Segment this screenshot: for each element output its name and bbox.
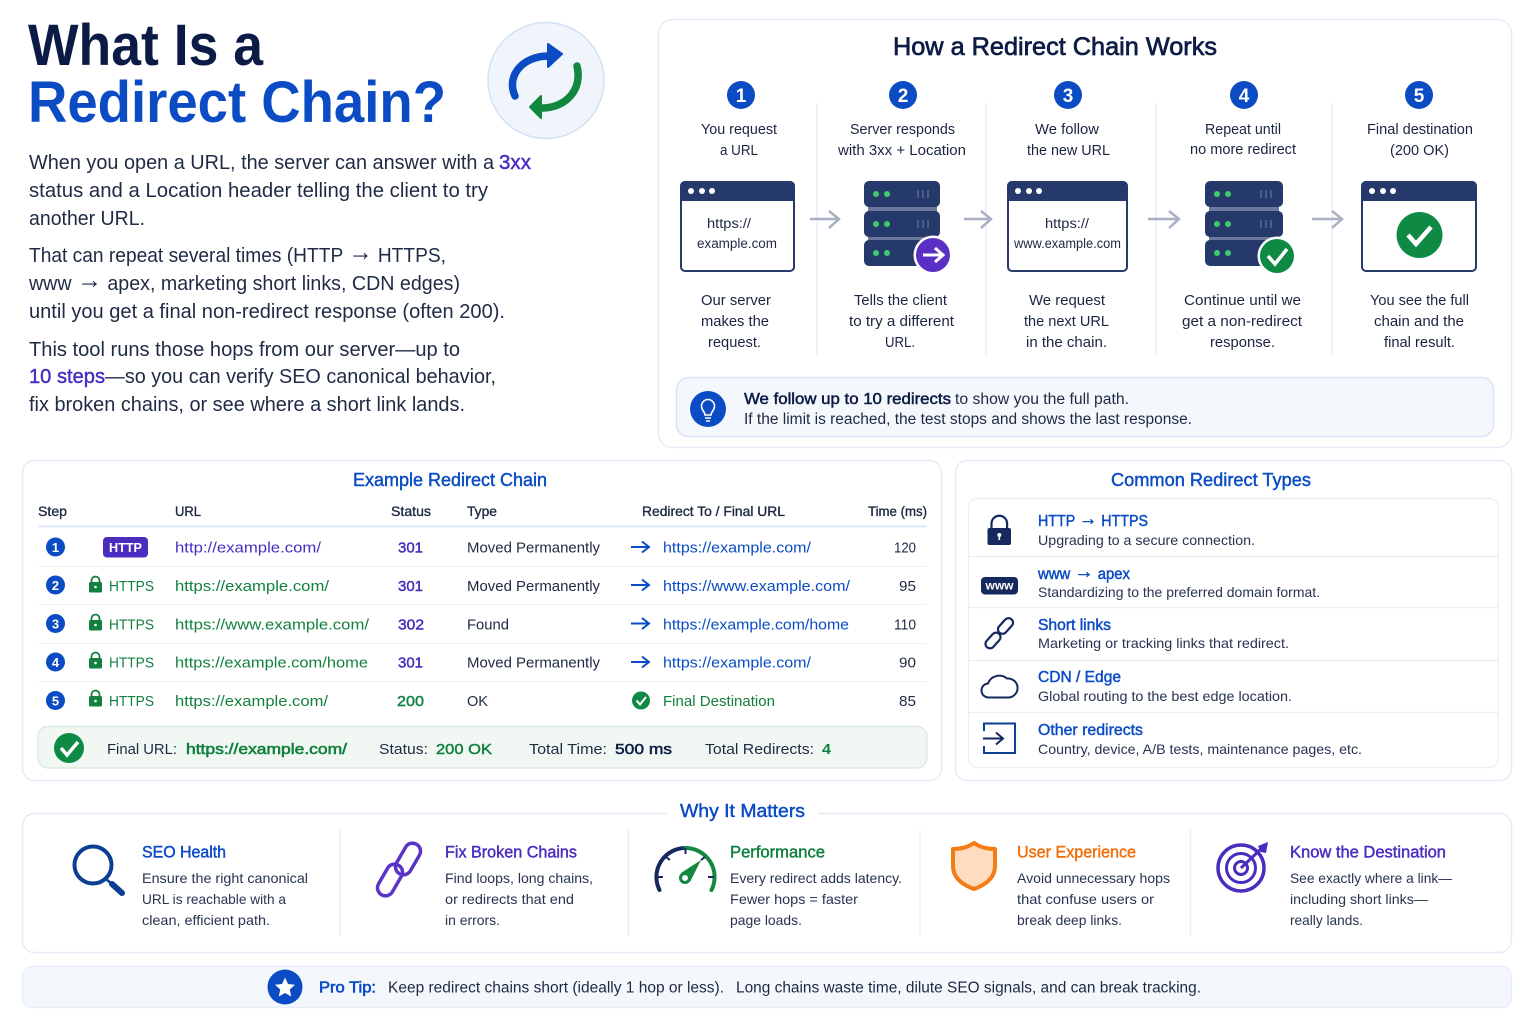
step 5: chain and the bbox=[1374, 314, 1464, 330]
table row 4: HTTPS bbox=[109, 656, 154, 672]
type: http to https: HTTP bbox=[1038, 513, 1078, 530]
item: seo health: SEO Health bbox=[142, 844, 226, 862]
pro tip bar: Keep redirect chains short (ideally 1 hop or less). bbox=[388, 980, 724, 996]
step 5: 5 bbox=[1414, 86, 1425, 107]
text block: intro: —so you can verify SEO canonical behavior, bbox=[105, 365, 496, 388]
callout: follow up to 10 redirects bbox=[676, 378, 1494, 436]
table row 5: 5 bbox=[52, 694, 59, 708]
table row 2: Moved Permanently bbox=[467, 579, 601, 595]
item: performance: Every redirect adds latency. bbox=[730, 871, 902, 886]
table row 4 bbox=[46, 652, 916, 672]
type: http to https: → bbox=[1079, 508, 1097, 530]
text block: intro bbox=[28, 151, 532, 416]
table row 5: 200 bbox=[397, 694, 424, 710]
item: user experience bbox=[953, 843, 1170, 928]
type: http to https: HTTPS bbox=[1097, 513, 1148, 530]
table header: Redirect To / Final URL bbox=[642, 503, 785, 519]
table row 3: 3 bbox=[52, 616, 59, 632]
type: short links: Short links bbox=[1038, 617, 1111, 634]
table header: Time (ms) bbox=[868, 503, 927, 519]
text block: intro: until you get a final non-redirect response (often 200). bbox=[29, 300, 505, 323]
step 5: final result. bbox=[1384, 335, 1455, 351]
summary bar: Total Time: bbox=[529, 741, 607, 758]
pro tip bar: Long chains waste time, dilute SEO signals, and can break tracking. bbox=[736, 980, 1201, 996]
step 4: Continue until we bbox=[1184, 293, 1301, 309]
table row 4: 90 bbox=[899, 656, 916, 672]
panel: how a redirect chain works bbox=[658, 20, 1512, 448]
step 1: You request bbox=[701, 122, 777, 138]
type: www to apex bbox=[981, 561, 1320, 600]
table row 5: Final Destination bbox=[663, 694, 775, 710]
text block: intro: another URL. bbox=[29, 207, 145, 230]
type: short links bbox=[984, 616, 1289, 651]
step 1: makes the bbox=[701, 314, 769, 330]
heading: why it matters: Why It Matters bbox=[680, 800, 805, 821]
table row 3: Found bbox=[467, 618, 509, 634]
step 3: in the chain. bbox=[1026, 335, 1107, 351]
text block: intro: fix broken chains, or see where a short link lands. bbox=[29, 393, 465, 416]
table row 2: 95 bbox=[899, 579, 916, 595]
text block: intro: apex, marketing short links, CDN edges) bbox=[102, 272, 460, 295]
table row 1 bbox=[46, 537, 916, 558]
type: short links: Marketing or tracking links that redirect. bbox=[1038, 636, 1289, 651]
summary bar: https://example.com/ bbox=[186, 741, 348, 758]
type: www to apex: www bbox=[984, 580, 1014, 592]
table row 4: 301 bbox=[398, 656, 423, 672]
step 2: to try a different bbox=[849, 314, 954, 330]
item: fix broken chains: or redirects that end bbox=[445, 892, 574, 907]
item: know the destination bbox=[1218, 842, 1452, 928]
step 1: 1 bbox=[736, 86, 747, 107]
table row 3: HTTPS bbox=[109, 618, 154, 634]
table row 3 bbox=[46, 614, 916, 634]
step 2: Tells the client bbox=[854, 293, 947, 309]
table row 3: 110 bbox=[894, 618, 916, 634]
table row 2: https://example.com/ bbox=[175, 579, 330, 595]
table row 1: http://example.com/ bbox=[175, 540, 322, 556]
step 1 bbox=[680, 81, 795, 351]
arrow 3 bbox=[1148, 211, 1179, 228]
table row 4: https://example.com/ bbox=[663, 656, 812, 672]
item: fix broken chains: Fix Broken Chains bbox=[445, 844, 577, 862]
title: Redirect Chain? bbox=[28, 70, 446, 135]
step 4: no more redirect bbox=[1190, 142, 1296, 158]
summary bar: Final URL: bbox=[107, 741, 177, 758]
type: www to apex: Standardizing to the preferred domain format. bbox=[1038, 585, 1320, 600]
table row 4: Moved Permanently bbox=[467, 656, 601, 672]
table row 2: 301 bbox=[398, 579, 423, 595]
table row 4: 4 bbox=[52, 655, 60, 670]
summary bar: Total Redirects: bbox=[705, 741, 814, 758]
item: user experience: User Experience bbox=[1017, 844, 1136, 862]
item: fix broken chains: Find loops, long chains, bbox=[445, 871, 593, 886]
table row 5: https://example.com/ bbox=[175, 694, 329, 710]
table header: Step bbox=[38, 503, 67, 519]
table row 2 bbox=[46, 576, 916, 595]
type: other redirects: Other redirects bbox=[1038, 722, 1143, 739]
step 1: Our server bbox=[701, 293, 771, 309]
step 3 bbox=[1007, 81, 1128, 351]
table row 2: https://www.example.com/ bbox=[663, 579, 851, 595]
text block: intro: status and a Location header telling the client to try bbox=[29, 179, 489, 202]
text block: intro: When you open a URL, the server can answer with a bbox=[29, 151, 495, 174]
table row 5: OK bbox=[467, 694, 488, 710]
item: know the destination: including short links— bbox=[1290, 892, 1428, 907]
step 5 bbox=[1361, 81, 1477, 351]
step 3: the next URL bbox=[1024, 314, 1109, 330]
panel: common redirect types bbox=[956, 460, 1512, 780]
table row 1: Moved Permanently bbox=[467, 540, 601, 556]
text block: intro: That can repeat several times (HTTP bbox=[29, 244, 365, 267]
item: know the destination: See exactly where a link— bbox=[1290, 871, 1452, 886]
step 3: 3 bbox=[1063, 86, 1073, 107]
type: other redirects bbox=[983, 722, 1362, 757]
step 5: Final destination bbox=[1367, 122, 1473, 138]
table row 3: https://www.example.com/ bbox=[175, 618, 370, 634]
table row 1: 1 bbox=[52, 540, 59, 555]
item: user experience: that confuse users or bbox=[1017, 892, 1154, 907]
type: http to https: Upgrading to a secure connection. bbox=[1038, 533, 1255, 548]
type: other redirects: Country, device, A/B tests, maintenance pages, etc. bbox=[1038, 742, 1362, 757]
heading: example redirect chain: Example Redirect Chain bbox=[353, 469, 547, 490]
step 2: with 3xx + Location bbox=[837, 143, 966, 159]
table row 5 bbox=[46, 690, 916, 710]
step 4: response. bbox=[1210, 335, 1275, 351]
summary bar: 200 OK bbox=[436, 741, 492, 758]
type: www to apex: → bbox=[1074, 561, 1094, 583]
step 4: Repeat until bbox=[1205, 122, 1281, 138]
heading: common redirect types: Common Redirect Types bbox=[1111, 469, 1311, 490]
icon: redirect cycle bbox=[488, 22, 604, 138]
item: performance: Fewer hops = faster bbox=[730, 892, 858, 907]
table row 1: https://example.com/ bbox=[663, 540, 812, 556]
item: user experience: break deep links. bbox=[1017, 913, 1122, 928]
table header bbox=[38, 503, 927, 519]
item: seo health: URL is reachable with a bbox=[142, 892, 286, 907]
text block: intro: www bbox=[29, 272, 73, 295]
step 3: www.example.com bbox=[1013, 236, 1121, 251]
step 3: the new URL bbox=[1027, 143, 1110, 159]
step 1: https:// bbox=[707, 216, 751, 231]
summary bar: Status: bbox=[379, 741, 428, 758]
item: performance bbox=[656, 844, 902, 928]
pro tip bar bbox=[22, 966, 1512, 1008]
summary bar: 4 bbox=[822, 741, 832, 758]
table row 1: HTTP bbox=[109, 540, 142, 555]
heading: how it works: How a Redirect Chain Works bbox=[893, 33, 1217, 61]
table header: Status bbox=[391, 503, 431, 519]
item: know the destination: really lands. bbox=[1290, 913, 1363, 928]
step 4: get a non-redirect bbox=[1182, 314, 1302, 330]
table row 5: HTTPS bbox=[109, 694, 154, 710]
item: fix broken chains bbox=[375, 840, 593, 928]
text block: intro: 3xx bbox=[499, 151, 532, 174]
pro tip bar: Pro Tip: bbox=[319, 980, 376, 996]
step 2: Server responds bbox=[850, 122, 955, 138]
title bbox=[28, 13, 446, 135]
arrow 4 bbox=[1312, 211, 1342, 228]
step 2: URL. bbox=[885, 335, 915, 351]
type: cdn edge: Global routing to the best edge location. bbox=[1038, 689, 1292, 704]
summary bar bbox=[38, 726, 927, 768]
table row 4: https://example.com/home bbox=[175, 656, 368, 672]
table row 1: 120 bbox=[894, 540, 916, 556]
step 2 bbox=[837, 81, 966, 351]
callout: follow up to 10 redirects: to show you the full path. bbox=[955, 391, 1129, 408]
text block: intro: → bbox=[348, 236, 373, 266]
text block: intro: 10 steps bbox=[29, 365, 105, 388]
text block: intro: → bbox=[77, 264, 102, 294]
step 2: 2 bbox=[898, 86, 908, 107]
item: user experience: Avoid unnecessary hops bbox=[1017, 871, 1170, 886]
callout: follow up to 10 redirects: If the limit is reached, the test stops and shows the last response. bbox=[744, 411, 1192, 428]
table row 2: HTTPS bbox=[109, 579, 154, 595]
step 3: We request bbox=[1029, 293, 1105, 309]
step 5: You see the full bbox=[1370, 293, 1469, 309]
step 4 bbox=[1182, 81, 1302, 351]
panel: why it matters bbox=[22, 800, 1512, 952]
item: seo health: Ensure the right canonical bbox=[142, 871, 308, 886]
title: What Is a bbox=[28, 13, 264, 78]
type: www to apex: apex bbox=[1094, 566, 1130, 583]
type: http to https bbox=[988, 508, 1255, 548]
table header: Type bbox=[467, 503, 497, 519]
item: know the destination: Know the Destination bbox=[1290, 844, 1446, 862]
step 1: request. bbox=[708, 335, 761, 351]
table row 3: https://example.com/home bbox=[663, 618, 849, 634]
type: cdn edge bbox=[981, 669, 1292, 704]
callout: follow up to 10 redirects: We follow up to 10 redirects bbox=[744, 391, 951, 408]
summary bar: 500 ms bbox=[615, 741, 672, 758]
text block: intro: This tool runs those hops from our server—up to bbox=[29, 338, 460, 361]
table header: URL bbox=[175, 503, 201, 519]
step 5: (200 OK) bbox=[1390, 143, 1449, 159]
item: performance: Performance bbox=[730, 844, 825, 862]
panel: example redirect chain bbox=[22, 460, 942, 780]
step 3: We follow bbox=[1035, 122, 1100, 138]
step 3: https:// bbox=[1045, 216, 1089, 231]
type: cdn edge: CDN / Edge bbox=[1038, 669, 1121, 686]
text block: intro: HTTPS, bbox=[373, 244, 446, 267]
step 1: a URL bbox=[720, 143, 758, 159]
step 1: example.com bbox=[697, 236, 777, 251]
table row 5: 85 bbox=[899, 694, 916, 710]
table row 1: 301 bbox=[398, 540, 423, 556]
table row 2: 2 bbox=[52, 578, 59, 593]
item: fix broken chains: in errors. bbox=[445, 913, 500, 928]
table row 3: 302 bbox=[398, 618, 424, 634]
item: seo health bbox=[74, 844, 308, 928]
item: seo health: clean, efficient path. bbox=[142, 913, 270, 928]
arrow 2 bbox=[964, 211, 991, 228]
item: performance: page loads. bbox=[730, 913, 802, 928]
type: www to apex: www bbox=[1038, 566, 1072, 583]
step 4: 4 bbox=[1239, 86, 1250, 107]
arrow 1 bbox=[810, 211, 839, 228]
